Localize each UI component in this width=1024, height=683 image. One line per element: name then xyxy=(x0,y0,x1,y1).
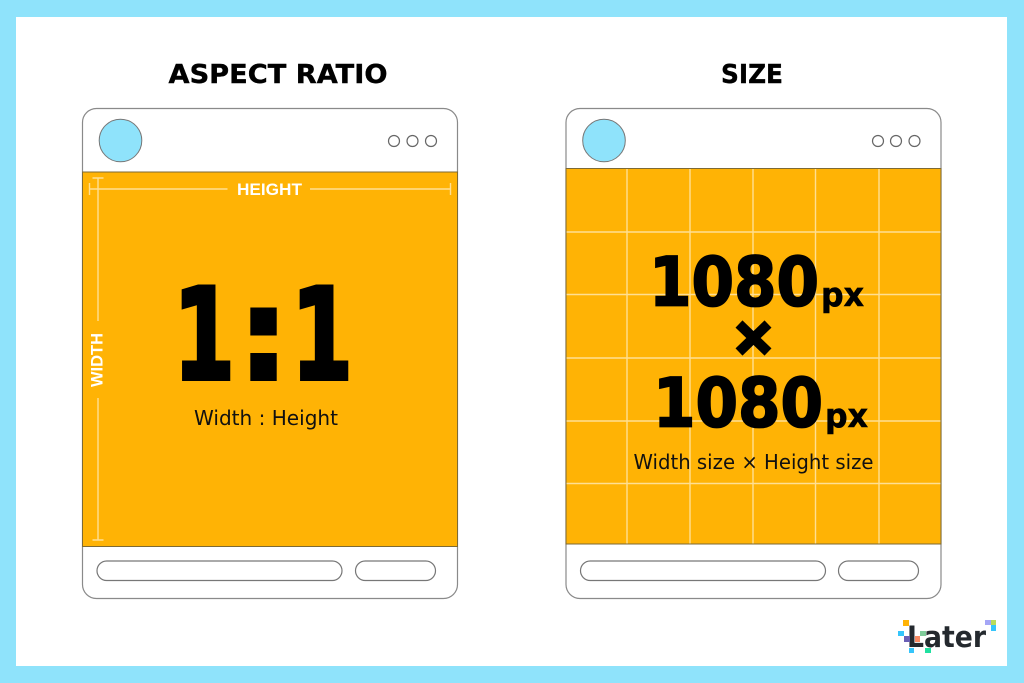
icon: profile avatar xyxy=(99,119,142,162)
panel: aspect ratio mockup xyxy=(82,108,458,598)
orange square image xyxy=(566,168,941,544)
ratio value xyxy=(173,261,353,409)
icon: menu dots xyxy=(872,136,920,146)
orange square image xyxy=(82,172,458,546)
width label: WIDTH xyxy=(88,333,106,387)
panel: size mockup xyxy=(566,108,941,598)
height label: HEIGHT xyxy=(237,180,303,199)
height px unit: px xyxy=(825,396,868,435)
ratio value: 1 xyxy=(173,261,235,409)
bottom bar: short pill xyxy=(356,561,436,580)
ratio caption: Width : Height xyxy=(194,406,338,430)
width pixel value: 1080 xyxy=(649,244,819,322)
logo pixels xyxy=(898,620,996,653)
height pixel value: 1080 xyxy=(653,364,823,444)
bottom bar: long pill xyxy=(97,561,342,580)
height dimension line xyxy=(90,183,450,195)
ratio value: : xyxy=(238,261,289,409)
logo: Later xyxy=(898,620,996,654)
multiply sign xyxy=(739,324,768,352)
card outline xyxy=(82,108,458,598)
width px unit: px xyxy=(821,275,864,314)
icon: profile avatar xyxy=(583,119,625,162)
size caption: Width size × Height size xyxy=(634,450,874,474)
width dimension line xyxy=(92,178,104,540)
pixel grid xyxy=(566,169,940,544)
ratio value: 1 xyxy=(291,261,353,409)
heading: aspect ratio: ASPECT RATIO xyxy=(168,60,388,90)
heading: size: SIZE xyxy=(721,60,783,90)
bottom bar: short pill xyxy=(838,561,918,580)
icon: menu dots xyxy=(388,136,436,146)
bottom bar: long pill xyxy=(580,561,826,580)
logo wordmark: Later xyxy=(907,620,987,654)
card outline xyxy=(566,108,941,598)
